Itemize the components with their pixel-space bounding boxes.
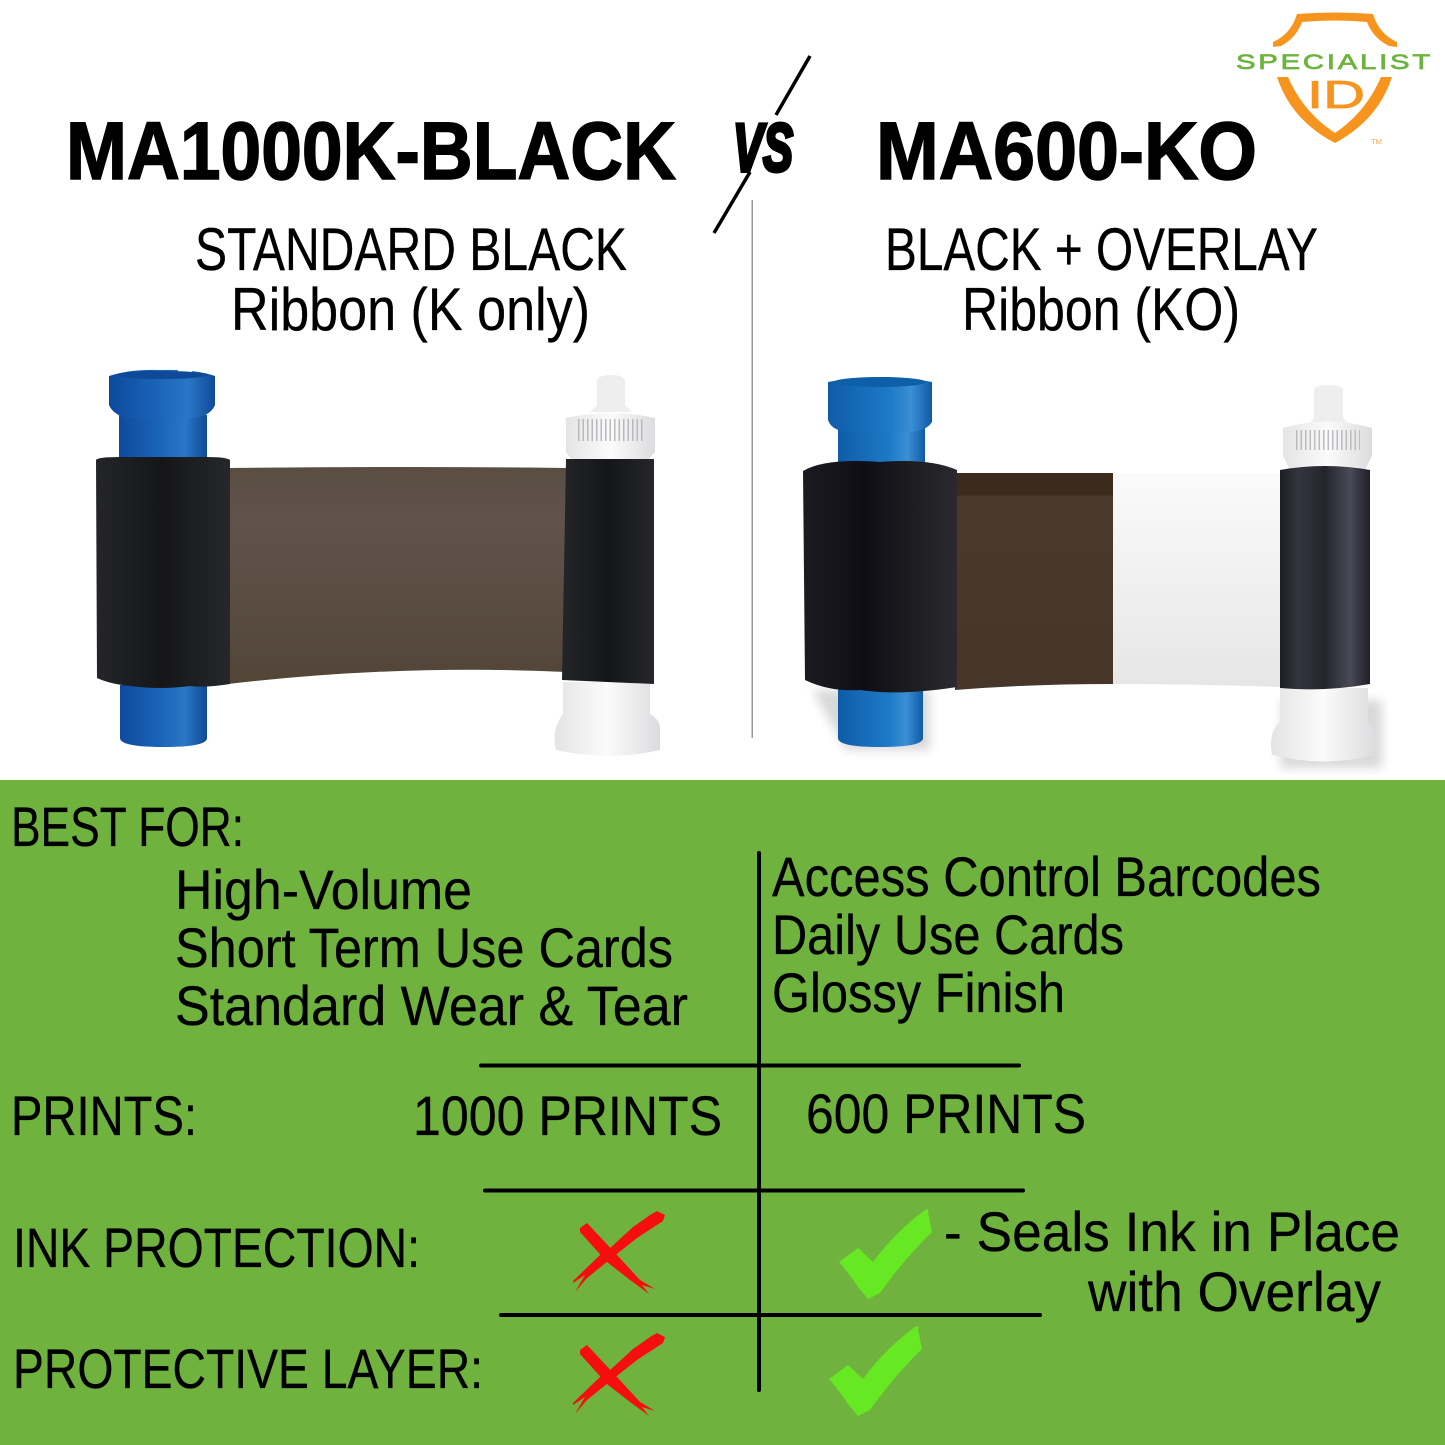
ribbon photo: MA600 KO (803, 377, 1382, 768)
white spool right (590, 375, 632, 412)
brown ribbon film (228, 467, 566, 684)
row: ink protection: with Overlay (1087, 1260, 1381, 1323)
white spool right (1308, 385, 1350, 425)
soft shadow (812, 690, 1382, 768)
overlay note: - Seals Ink in Place (944, 1200, 1400, 1263)
row: prints: 600 PRINTS (806, 1082, 1086, 1145)
black roll left (96, 457, 230, 688)
ink panel (955, 473, 1113, 690)
subtitle: black + overlay ribbon: BLACK + OVERLAY (885, 216, 1318, 283)
row: best for: Short Term Use Cards (175, 916, 673, 979)
row: best for: Glossy Finish (772, 961, 1065, 1024)
row: prints: 1000 PRINTS (413, 1084, 722, 1147)
vs badge (714, 56, 810, 233)
center divider (752, 200, 753, 738)
row: ink protection (13, 1200, 1400, 1323)
title: MA600-KO: MA600-KO (876, 106, 1257, 197)
logo: Specialist ID (1236, 12, 1433, 146)
row: protective layer: PROTECTIVE LAYER: (13, 1337, 483, 1400)
icon: red cross (573, 1333, 665, 1416)
blue spool left (838, 688, 923, 747)
row: best for: Access Control Barcodes (772, 845, 1321, 908)
subtitle: standard black ribbon: STANDARD BLACK (195, 216, 627, 283)
black roll right (562, 459, 654, 684)
black roll right (1280, 466, 1370, 689)
row: best for: Standard Wear & Tear (175, 974, 688, 1037)
row: prints: PRINTS: (11, 1084, 197, 1147)
row: ink protection: INK PROTECTION: (13, 1216, 420, 1279)
row: best for (11, 795, 1321, 1037)
subtitle: standard black ribbon: Ribbon (K only) (231, 276, 590, 343)
panel background (0, 780, 1445, 1445)
row: prints (11, 1082, 1086, 1147)
panel: comparison table (0, 780, 1445, 1445)
row: best for: Daily Use Cards (772, 903, 1124, 966)
black roll left (803, 461, 957, 692)
vs badge: VS (733, 110, 793, 186)
icon: green check (839, 1209, 932, 1299)
icon: green check (829, 1326, 922, 1416)
title: MA1000K-BLACK: MA1000K-BLACK (66, 106, 676, 197)
row: best for: BEST FOR: (11, 795, 244, 858)
subtitle: black + overlay ribbon (885, 216, 1318, 343)
subtitle: black + overlay ribbon: Ribbon (KO) (962, 276, 1240, 343)
row: best for: High-Volume (175, 858, 472, 921)
logo trademark: TM (1371, 139, 1382, 146)
row: protective layer (13, 1326, 922, 1416)
blue spool left (120, 685, 207, 747)
logo shield (1273, 12, 1397, 143)
icon: red cross (573, 1211, 665, 1294)
ribbon photo: MA1000K black (96, 369, 660, 756)
logo wordmark: SPECIALIST (1236, 51, 1433, 74)
overlay panel (1113, 473, 1283, 687)
subtitle: standard black ribbon (195, 216, 627, 343)
logo ID: ID (1307, 74, 1365, 117)
table grid lines (481, 853, 1040, 1390)
